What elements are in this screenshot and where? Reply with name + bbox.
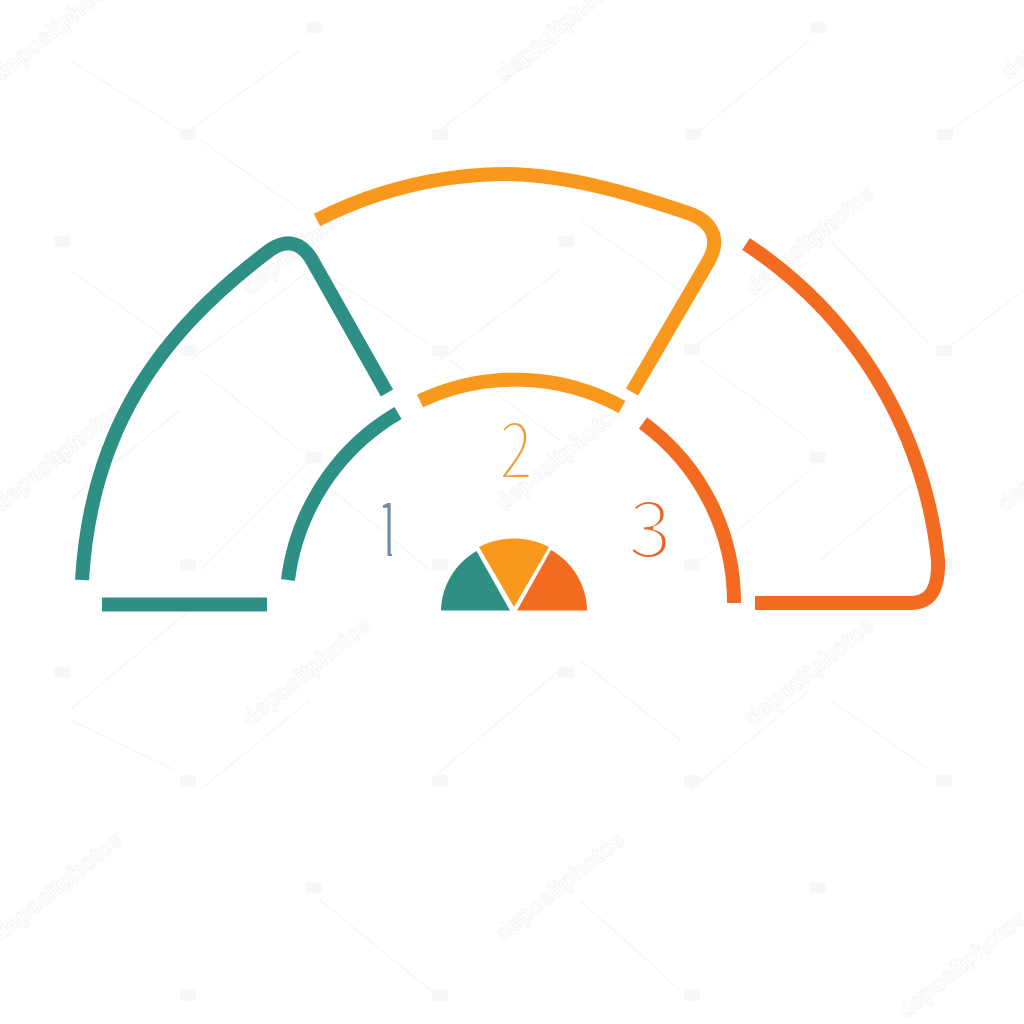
mini semicircle icon (441, 538, 587, 610)
text: depositphotos (237, 180, 376, 300)
number 1: 1 (365, 466, 410, 582)
teal outer curve and side (82, 243, 387, 580)
panel 2: orange segment outline (317, 174, 714, 407)
icon wedge red-orange (517, 550, 587, 610)
panel 3: red-orange segment outline (643, 244, 938, 603)
number 3: 3 (628, 466, 672, 582)
text: depositphotos (740, 611, 879, 731)
text: depositphotos (740, 180, 879, 300)
teal inner arc (288, 413, 398, 580)
icon wedge orange (479, 538, 549, 607)
teal base bar (102, 598, 267, 612)
icon wedge teal (441, 551, 510, 610)
red-orange inner arc (643, 423, 734, 603)
red-orange outer arc and base (746, 244, 938, 603)
text: depositphotos (237, 611, 376, 731)
orange outer arc and side (317, 174, 714, 392)
orange inner arc (420, 380, 622, 407)
text: depositphotos (490, 826, 629, 946)
text: depositphotos (490, 396, 629, 516)
number 2: 2 (499, 386, 533, 503)
panel 1: teal segment outline (82, 243, 398, 604)
